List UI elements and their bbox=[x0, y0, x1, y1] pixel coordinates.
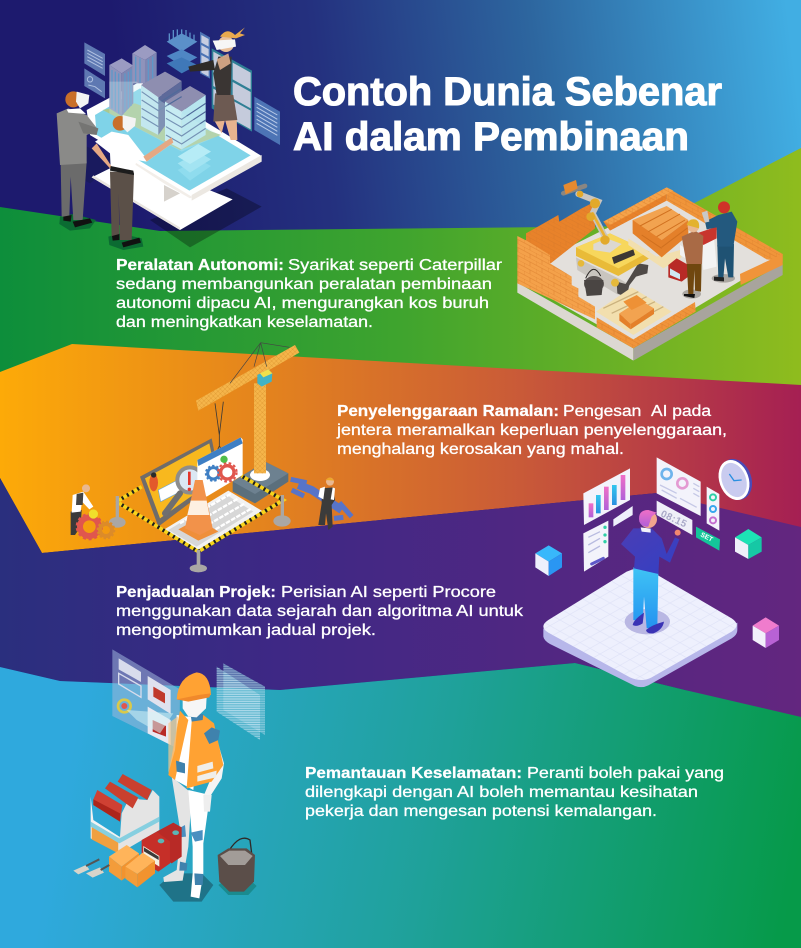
text block: Peralatan Autonomi: autonomi dipacu AI, mengurangkan kos buruh bbox=[116, 295, 489, 312]
laptop screen bbox=[140, 438, 220, 527]
text block: Pemantauan Keselamatan: Pemantauan Keselamatan: bbox=[305, 765, 522, 782]
bug icon bbox=[149, 472, 158, 491]
bucket shadow bbox=[218, 878, 257, 895]
shoulder and neck bbox=[191, 714, 220, 744]
background band: teal to green bbox=[0, 663, 801, 948]
traffic cone bbox=[178, 480, 218, 541]
hologram panels around woman bbox=[200, 32, 280, 145]
cube pink bbox=[753, 617, 779, 648]
text block: Penjadualan Projek: Perisian AI seperti Procore bbox=[281, 584, 496, 601]
text block: Peralatan Autonomi: Peralatan Autonomi: bbox=[116, 257, 284, 274]
settings window bbox=[197, 437, 243, 497]
robot body bbox=[163, 715, 224, 898]
pallet with bricks back bbox=[628, 206, 688, 268]
crane cab bbox=[257, 369, 272, 387]
text block: Penyelenggaraan Ramalan: jentera meramalkan keperluan penyelenggaraan, bbox=[336, 422, 727, 439]
engineer yellow hat bbox=[682, 219, 703, 299]
bar chart panel bbox=[583, 468, 630, 525]
brick held by robot bbox=[563, 180, 578, 194]
title: Contoh Dunia Sebenar bbox=[293, 70, 722, 114]
floor slab bbox=[517, 198, 783, 361]
bucket bbox=[584, 269, 604, 296]
blue wireframe hologram bbox=[167, 29, 197, 73]
crane mast bbox=[254, 383, 266, 473]
layered hologram plates bbox=[178, 144, 211, 181]
data hologram bbox=[217, 663, 265, 740]
background band: purple bbox=[0, 478, 801, 720]
hook cables bbox=[215, 402, 224, 453]
table shadow bbox=[150, 188, 262, 247]
cube green bbox=[735, 529, 762, 559]
robot tracks and body bbox=[576, 233, 649, 297]
text block: Penyelenggaraan Ramalan: menghalang kerosakan yang mahal. bbox=[337, 441, 624, 458]
background band: green bbox=[0, 148, 801, 390]
brick stacks bbox=[109, 845, 155, 887]
building blocks bbox=[109, 72, 220, 152]
text block: Peralatan Autonomi bbox=[116, 257, 503, 331]
cube blue bbox=[535, 545, 562, 576]
man in white shirt bbox=[92, 115, 173, 250]
supplies: jerry cans and bags bbox=[668, 227, 717, 282]
wall: front and right low bbox=[597, 254, 783, 348]
robot head and helmet bbox=[177, 672, 211, 717]
text block: Pemantauan Keselamatan: Peranti boleh pakai yang bbox=[527, 765, 724, 782]
set button: SET bbox=[699, 532, 714, 544]
checklist panel bbox=[583, 521, 608, 572]
barrier posts bbox=[109, 495, 291, 572]
small icon panel bbox=[613, 506, 633, 527]
text block: Pemantauan Keselamatan: dilengkapi dengan AI boleh memantau kesihatan bbox=[305, 784, 698, 801]
timer panel bbox=[657, 501, 692, 535]
pallet with bricks front bbox=[596, 287, 672, 335]
crane boom bbox=[196, 343, 299, 411]
background band: orange bbox=[0, 344, 801, 553]
towers bbox=[109, 45, 157, 116]
bucket bbox=[218, 838, 255, 892]
illustration: person at isometric platform with floating dashboards bbox=[535, 454, 779, 687]
holographic panels left bbox=[84, 42, 105, 98]
trowels bbox=[73, 859, 109, 878]
robot arm bbox=[563, 186, 610, 245]
worker with gears bbox=[71, 484, 114, 539]
text block: Penjadualan Projek: Penjadualan Projek: bbox=[116, 584, 276, 601]
text block: Penyelenggaraan Ramalan: Penyelenggaraan Ramalan: bbox=[337, 403, 559, 420]
text block: Penjadualan Projek bbox=[116, 584, 524, 639]
text block: Penjadualan Projek: menggunakan data sejarah dan algoritma AI untuk bbox=[116, 603, 524, 620]
hologram panel bbox=[112, 649, 180, 749]
text block: Peralatan Autonomi: dan meningkatkan keselamatan. bbox=[116, 314, 373, 331]
text block: Penyelenggaraan Ramalan: Pengesan AI pada bbox=[563, 403, 711, 420]
table base bbox=[92, 153, 233, 230]
illustration: brick site with robot arm and engineers bbox=[517, 180, 783, 361]
woman with VR headset bbox=[188, 27, 245, 140]
background band: top navy to blue bbox=[0, 0, 801, 235]
floor shadow bbox=[625, 609, 670, 634]
illustration: robot worker with holograms and building materials bbox=[73, 649, 265, 902]
person in blue suit bbox=[621, 510, 681, 633]
laptop keyboard bbox=[163, 491, 263, 553]
magnifying glass bbox=[165, 467, 203, 513]
text block: Peralatan Autonomi: sedang membangunkan peralatan pembinaan bbox=[116, 276, 492, 293]
platform bbox=[543, 568, 737, 687]
concrete block bbox=[233, 462, 288, 503]
illustration: crane over laptop with cone and workers bbox=[71, 343, 352, 572]
worker with wrench bbox=[291, 478, 352, 530]
text block: Pemantauan Keselamatan: pekerja dan mengesan potensi kemalangan. bbox=[305, 803, 657, 820]
text block: Pemantauan Keselamatan bbox=[305, 765, 724, 820]
ring status panel bbox=[707, 487, 719, 531]
barrier tape bbox=[117, 476, 283, 552]
set button bbox=[696, 527, 720, 551]
wall: front left bbox=[517, 236, 595, 319]
orange vest bbox=[168, 711, 223, 788]
title: AI dalam Pembinaan bbox=[293, 115, 689, 159]
wall clock bbox=[713, 454, 758, 504]
jerry cans bbox=[142, 823, 182, 872]
text block: Peralatan Autonomi: Syarikat seperti Caterpillar bbox=[288, 257, 503, 274]
robot floor shadow bbox=[159, 873, 213, 902]
wall: back and back right bbox=[603, 187, 783, 262]
table top bbox=[87, 82, 262, 201]
donut panel bbox=[657, 457, 701, 516]
text block: Penjadualan Projek: mengoptimumkan jadual projek. bbox=[116, 622, 376, 639]
timer panel: 08:15 bbox=[659, 509, 689, 530]
man in grey suit bbox=[57, 91, 98, 231]
illustration: people with VR around holographic city table bbox=[57, 27, 280, 250]
wall: back left bbox=[526, 202, 595, 263]
title bbox=[293, 70, 722, 159]
bags of material bbox=[91, 774, 159, 853]
engineer red hat bbox=[702, 201, 737, 283]
text block: Penyelenggaraan Ramalan bbox=[336, 403, 727, 458]
